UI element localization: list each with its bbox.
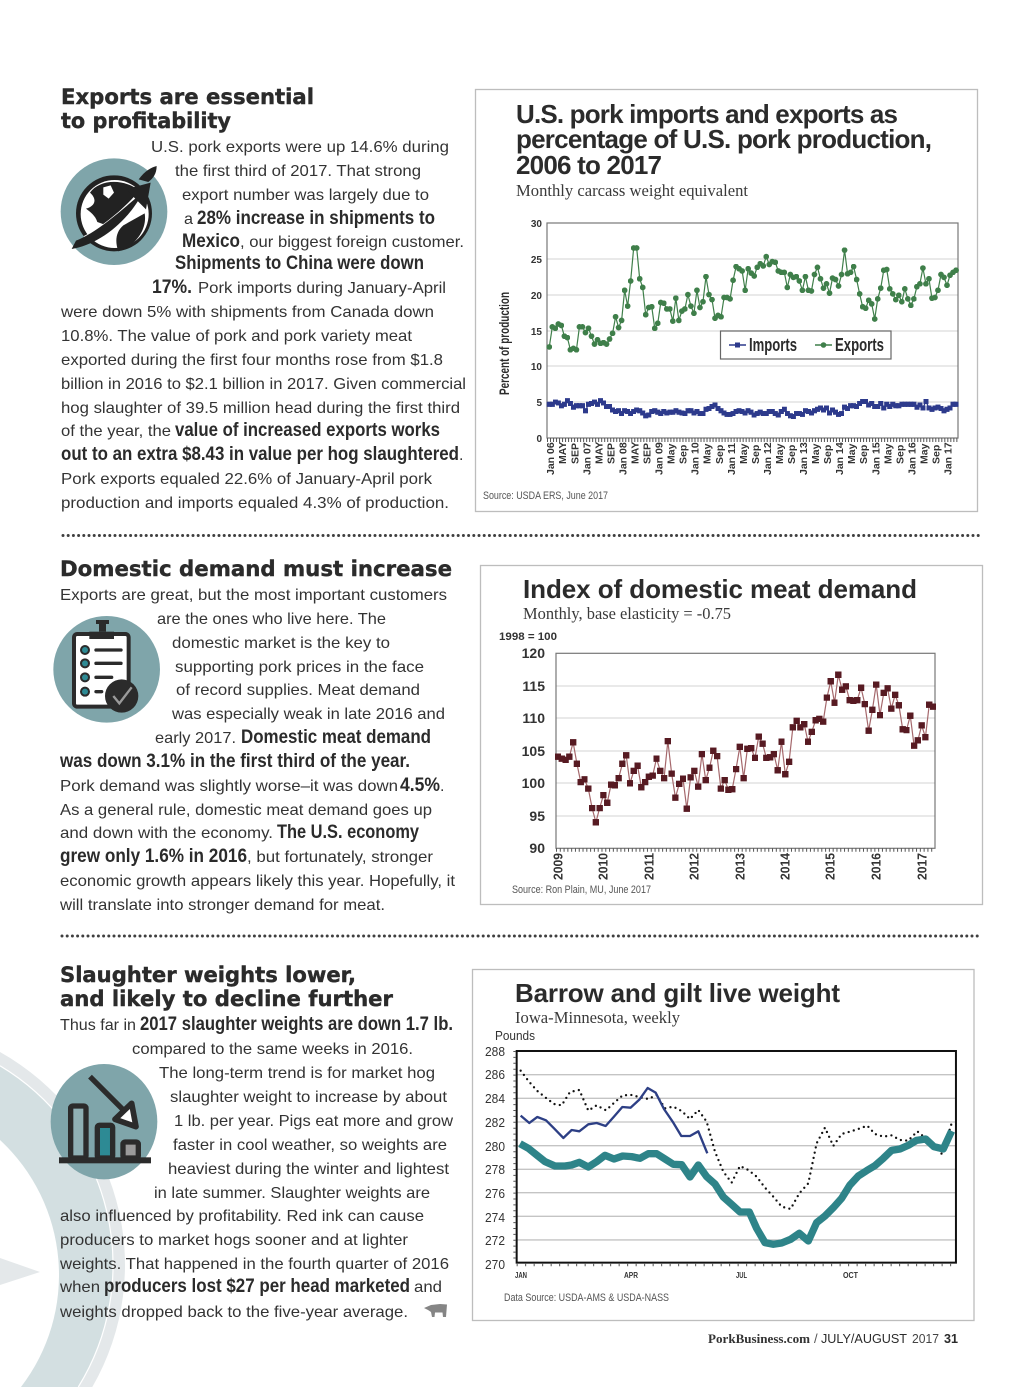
- y axis labels: 272: [485, 1233, 505, 1248]
- panel: domestic meat demand chart: [480, 566, 982, 904]
- text block: slaughter weights: slaughter weight to increase by about: [170, 1089, 448, 1106]
- text block: exports: of the year, the: [61, 423, 171, 440]
- source note: Source: Ron Plain, MU, June 2017: [512, 884, 651, 896]
- text block: exports: value of increased exports works: [175, 420, 440, 441]
- chart title: 2006 to 2017: [516, 150, 662, 180]
- x axis labels: May: [918, 443, 930, 464]
- line chart: demand index: 120: [522, 645, 545, 661]
- divider: [63, 534, 981, 537]
- text block: domestic demand: and down with the economy.: [60, 825, 273, 842]
- y axis labels: 282: [485, 1115, 505, 1130]
- x axis labels: May: [774, 443, 786, 464]
- x axis years: 2012: [686, 853, 702, 880]
- x axis labels: Jan 14: [834, 442, 846, 475]
- x axis years: 2017: [914, 853, 930, 880]
- text block: slaughter weights: [59, 1014, 453, 1321]
- y axis labels: 280: [485, 1139, 505, 1154]
- x axis labels: Sep: [858, 445, 870, 464]
- line chart: demand index: 110: [522, 710, 545, 726]
- y axis labels: 278: [485, 1162, 505, 1177]
- text block: exports: a: [184, 211, 193, 228]
- line chart: imports and exports: 20: [531, 291, 542, 302]
- series: five-year average: [520, 1131, 952, 1244]
- x axis labels: MAY: [630, 442, 642, 464]
- x axis labels: May: [702, 443, 714, 464]
- x axis labels: Jan 11: [726, 443, 738, 475]
- text block: slaughter weights: in late summer. Slaughter weights are: [154, 1185, 430, 1202]
- line chart: imports and exports: 10: [531, 362, 542, 373]
- text block: exports: 28% increase in shipments to: [197, 208, 435, 229]
- text block: domestic demand: Domestic meat demand: [241, 727, 431, 748]
- x axis months: JAN: [515, 1271, 527, 1280]
- text block: exports: billion in 2016 to $2.1 billion in 2017. Given commercial: [61, 376, 466, 393]
- footer: PorkBusiness.com: [708, 1331, 810, 1346]
- x axis labels: MAY: [557, 442, 569, 464]
- footer: 2017: [912, 1331, 939, 1346]
- heading: slaughter weights: [60, 963, 394, 1011]
- axis unit: Pounds: [495, 1028, 535, 1043]
- x axis labels: Jan 10: [690, 442, 702, 475]
- source note: Source: USDA ERS, June 2017: [483, 490, 608, 502]
- footer: 31: [944, 1331, 958, 1346]
- text block: exports: were down 5% with shipments from Canada down: [60, 304, 434, 321]
- section: domestic demand: [53, 557, 456, 914]
- x axis months: [515, 1271, 858, 1280]
- chart subtitle: Monthly, base elasticity = -0.75: [523, 604, 731, 623]
- x axis labels: May: [882, 443, 894, 464]
- axis title: Percent of production: [496, 292, 512, 395]
- text block: domestic demand: are the ones who live here. The: [157, 611, 386, 628]
- x axis years: 2011: [642, 853, 656, 880]
- x axis labels: Jan 06: [545, 442, 557, 475]
- legend: [720, 331, 891, 359]
- text block: exports: export number was largely due to: [182, 187, 429, 204]
- text block: domestic demand: Pork demand was slightly worse–it was down: [60, 778, 398, 795]
- x axis months: OCT: [843, 1271, 858, 1280]
- text block: domestic demand: will translate into stronger demand for meat.: [59, 897, 385, 914]
- x axis labels: Jan 07: [581, 442, 593, 475]
- series: exports: [549, 248, 956, 350]
- icon: globe with arrow: [61, 158, 167, 265]
- footer: JULY/AUGUST: [821, 1331, 907, 1346]
- y axis labels: 274: [485, 1210, 505, 1225]
- section: exports: [60, 85, 466, 512]
- text block: slaughter weights: Thus far in: [60, 1017, 136, 1034]
- text block: domestic demand: The U.S. economy: [277, 822, 419, 843]
- line chart: demand index: 105: [522, 743, 545, 759]
- line chart: demand index: [499, 631, 935, 880]
- icon: clipboard checklist: [53, 616, 160, 723]
- text block: domestic demand: was especially weak in late 2016 and: [171, 706, 445, 723]
- text block: domestic demand: early 2017.: [155, 730, 236, 747]
- text block: exports: Shipments to China were down: [175, 253, 424, 274]
- line chart: demand index: 1998 = 100: [499, 631, 557, 643]
- x axis labels: May: [810, 443, 822, 464]
- line chart: demand index: 100: [522, 775, 545, 791]
- x axis labels: Sep: [786, 445, 798, 464]
- heading: exports: [61, 85, 314, 133]
- text block: domestic demand: economic growth appears likely this year. Hopefully, it: [60, 873, 456, 890]
- legend: Exports: [835, 335, 884, 355]
- series: demand index: [558, 675, 933, 822]
- heading: exports: Exports are essential: [61, 85, 314, 109]
- heading: slaughter weights: Slaughter weights lower,: [60, 963, 356, 987]
- x axis labels: May: [846, 443, 858, 464]
- text block: exports: Pork imports during January-April: [198, 280, 446, 297]
- text block: slaughter weights: producers lost $27 per head marketed: [104, 1276, 410, 1297]
- y axis labels: [485, 1044, 505, 1272]
- x axis years: 2015: [822, 853, 838, 880]
- x axis years: 2009: [550, 853, 566, 880]
- line chart: demand index: 90: [529, 840, 545, 856]
- text block: slaughter weights: also influenced by profitability. Red ink can cause: [60, 1208, 424, 1225]
- panel: imports and exports chart: [476, 90, 978, 512]
- x axis labels: Jan 16: [906, 442, 918, 475]
- chart title: Barrow and gilt live weight: [515, 978, 840, 1008]
- line chart: imports and exports: 0: [536, 434, 542, 445]
- x axis labels: MAY: [593, 442, 605, 464]
- x axis labels: SEP: [605, 443, 617, 464]
- divider: [62, 934, 981, 938]
- y axis labels: 284: [485, 1091, 505, 1106]
- x axis years: 2016: [868, 853, 884, 880]
- text block: exports: out to an extra $8.43 in value per hog slaughtered: [61, 444, 459, 465]
- legend: Imports: [749, 335, 797, 355]
- chart subtitle: Monthly carcass weight equivalent: [516, 181, 748, 200]
- x axis months: JUL: [736, 1271, 747, 1280]
- text block: exports: U.S. pork exports were up 14.6% during: [151, 139, 449, 156]
- text block: slaughter weights: 1 lb. per year. Pigs eat more and grow: [174, 1113, 453, 1130]
- text block: slaughter weights: weights dropped back to the five-year average.: [59, 1304, 408, 1321]
- x axis labels: Sep: [678, 445, 690, 464]
- series: prior-year dotted: [521, 1071, 952, 1209]
- series: 2017: [521, 1088, 707, 1153]
- line chart: demand index: 115: [522, 678, 545, 694]
- section: slaughter weights: [51, 963, 453, 1321]
- x axis labels: Sep: [930, 445, 942, 464]
- text block: domestic demand: Exports are great, but the most important customers: [60, 587, 447, 604]
- x axis labels: May: [666, 443, 678, 464]
- footer: [708, 1331, 958, 1346]
- series: imports: [549, 401, 956, 416]
- heading: domestic demand: Domestic demand must increase: [60, 557, 452, 581]
- source note: Data Source: USDA-AMS & USDA-NASS: [504, 1292, 669, 1304]
- text block: slaughter weights: The long-term trend is for market hog: [159, 1065, 435, 1082]
- text block: domestic demand: [59, 587, 456, 914]
- line chart: imports and exports: 25: [531, 255, 542, 266]
- text block: exports: [60, 139, 466, 512]
- x axis labels: Jan 08: [617, 442, 629, 475]
- x axis labels: SEP: [642, 443, 654, 464]
- x axis labels: May: [738, 443, 750, 464]
- chart title: [516, 99, 932, 180]
- x axis labels: Jan 13: [798, 442, 810, 475]
- x axis labels: Jan 12: [762, 442, 774, 475]
- chart subtitle: Iowa-Minnesota, weekly: [515, 1008, 681, 1027]
- text block: slaughter weights: and: [414, 1279, 442, 1296]
- text block: exports: 17%.: [152, 277, 192, 298]
- text block: exports: hog slaughter of 39.5 million head during the first third: [61, 400, 460, 417]
- text block: domestic demand: 4.5%: [400, 775, 440, 796]
- text block: exports: the first third of 2017. That strong: [175, 163, 421, 180]
- line chart: imports and exports: 5: [536, 398, 542, 409]
- x axis labels: Jan 17: [942, 442, 954, 475]
- y axis labels: 276: [485, 1186, 505, 1201]
- text block: domestic demand: domestic market is the key to: [172, 635, 390, 652]
- y axis labels: 288: [485, 1044, 505, 1059]
- text block: domestic demand: of record supplies. Meat demand: [176, 682, 420, 699]
- text block: exports: exported during the first four months rose from $1.8: [61, 352, 443, 369]
- x axis labels: Sep: [750, 445, 762, 464]
- text block: exports: 10.8%. The value of pork and pork variety meat: [61, 328, 413, 345]
- line chart: imports and exports: 30: [531, 219, 542, 230]
- x axis years: 2014: [778, 852, 792, 880]
- x axis labels: Jan 09: [654, 442, 666, 475]
- text block: slaughter weights: when: [59, 1279, 100, 1296]
- x axis labels: [545, 442, 954, 475]
- text block: slaughter weights: compared to the same weeks in 2016.: [132, 1041, 413, 1058]
- x axis labels: Sep: [714, 445, 726, 464]
- line chart: demand index: 95: [529, 808, 545, 824]
- chart title: percentage of U.S. pork production,: [516, 124, 932, 154]
- x axis labels: Sep: [822, 445, 834, 464]
- text block: exports: Pork exports equaled 22.6% of January-April pork: [61, 471, 433, 488]
- text block: slaughter weights: heaviest during the winter and lightest: [168, 1161, 450, 1178]
- x axis labels: Sep: [894, 445, 906, 464]
- text block: domestic demand: , but fortunately, stronger: [247, 849, 434, 866]
- text block: domestic demand: As a general rule, domestic meat demand goes up: [60, 802, 432, 819]
- line chart: live weight: [515, 1051, 956, 1265]
- text block: domestic demand: was down 3.1% in the first third of the year.: [59, 751, 410, 772]
- chart title: U.S. pork imports and exports as: [516, 99, 898, 129]
- chart title: Index of domestic meat demand: [523, 574, 917, 604]
- x axis years: [550, 852, 930, 880]
- line chart: imports and exports: [496, 219, 958, 475]
- y axis labels: 286: [485, 1067, 505, 1082]
- text block: domestic demand: .: [440, 778, 444, 795]
- text block: domestic demand: grew only 1.6% in 2016: [60, 846, 247, 867]
- text block: slaughter weights: producers to market hogs sooner and at lighter: [60, 1232, 409, 1249]
- x axis labels: SEP: [569, 443, 581, 464]
- background arcs: [0, 1052, 125, 1387]
- icon: falling bar chart: [51, 1064, 157, 1179]
- text block: domestic demand: supporting pork prices in the face: [175, 659, 424, 676]
- text block: slaughter weights: 2017 slaughter weights are down 1.7 lb.: [140, 1014, 453, 1035]
- x axis years: 2010: [596, 853, 610, 880]
- text block: slaughter weights: weights. That happened in the fourth quarter of 2016: [59, 1256, 449, 1273]
- x axis labels: Jan 15: [870, 442, 882, 475]
- heading: exports: to profitability: [61, 109, 231, 133]
- x axis months: APR: [624, 1271, 638, 1280]
- panel: barrow and gilt weight chart: [472, 970, 974, 1320]
- text block: exports: , our biggest foreign customer.: [240, 234, 464, 251]
- text block: exports: .: [459, 447, 463, 464]
- y axis labels: 270: [485, 1257, 505, 1272]
- heading: slaughter weights: and likely to decline further: [60, 987, 394, 1011]
- icon: pig end mark: [424, 1304, 447, 1317]
- text block: exports: production and imports equaled 4.3% of production.: [61, 495, 449, 512]
- text block: exports: Mexico: [182, 231, 240, 252]
- text block: slaughter weights: faster in cool weather, so weights are: [173, 1137, 447, 1154]
- x axis years: 2013: [732, 853, 748, 880]
- footer: /: [814, 1331, 818, 1346]
- line chart: imports and exports: 15: [531, 327, 542, 338]
